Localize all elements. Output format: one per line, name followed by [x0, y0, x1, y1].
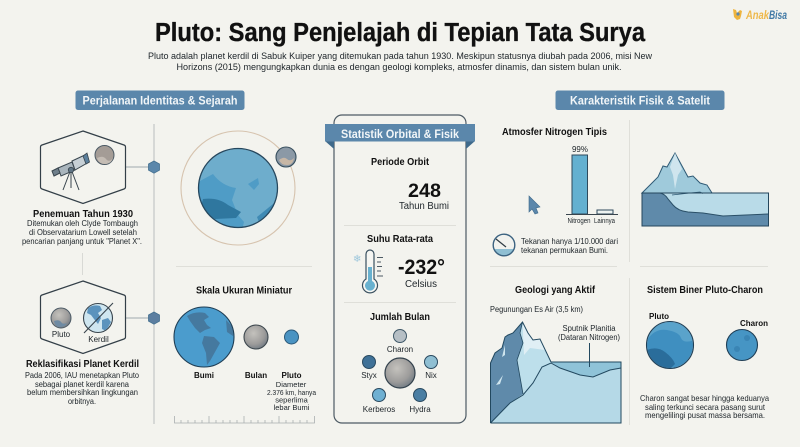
- text: reklasifikasi: [25, 358, 140, 406]
- icon: Pluto: Pluto: [282, 371, 302, 380]
- label: sputnik planitia: (Dataran Nitrogen): [558, 333, 620, 342]
- panel: geologi yang aktif: [490, 285, 621, 423]
- illustration: nitrogen glacier iceberg: [642, 153, 768, 226]
- moon: Kerberos: Kerberos: [363, 405, 395, 414]
- icon: Bumi: [174, 307, 234, 380]
- text: reklasifikasi: Reklasifikasi Planet Kerdil: [26, 358, 139, 370]
- panel: geologi yang aktif: Pegunungan Es Air (3,5 km): [490, 305, 583, 314]
- panel: atmosfer nitrogen tipis: Atmosfer Nitrogen Tipis: [502, 127, 607, 138]
- intro text: [148, 51, 652, 73]
- text: penemuan: Ditemukan oleh Clyde Tombaugh: [27, 219, 138, 228]
- heading: Karakteristik Fisik & Satelit: [556, 90, 724, 110]
- logo: AnakBisa: [733, 9, 787, 22]
- moon: Hydra: Hydra: [409, 405, 431, 414]
- text: charon note: mengelilingi pusat massa bersama.: [645, 410, 765, 420]
- stat: periode orbit: Tahun Bumi: [399, 201, 449, 212]
- intro text: Pluto adalah planet kerdil di Sabuk Kuiper yang ditemukan pada tahun 1930. Meskipun statusnya diubah pada 2006, misi New: [148, 51, 652, 62]
- banner: Statistik Orbital & Fisik: [341, 129, 460, 141]
- heading: Karakteristik Fisik & Satelit: Karakteristik Fisik & Satelit: [570, 96, 710, 108]
- banner: [325, 124, 475, 149]
- intro text: Horizons (2015) mengungkapkan dunia es dengan geologi kompleks, atmosfer dinamis, dan sistem bulan unik.: [176, 62, 622, 73]
- text: charon note: saling terkunci secara pasang surut: [645, 402, 766, 412]
- moon: Charon: Charon: [387, 345, 413, 354]
- logo: AnakBisa: Anak: [745, 10, 769, 22]
- stat: jumlah bulan: [361, 312, 438, 414]
- icon: pressure gauge: [492, 234, 516, 257]
- text: tekanan: [521, 236, 618, 255]
- stat: periode orbit: [371, 157, 449, 212]
- logo: AnakBisa: Bisa: [769, 10, 787, 22]
- text: tekanan: Tekanan hanya 1/10.000 dari: [521, 236, 618, 246]
- illustration: mountain and plain: [490, 322, 621, 423]
- timeline axis: [153, 124, 155, 424]
- heading: Perjalanan Identitas & Sejarah: Perjalanan Identitas & Sejarah: [82, 96, 238, 108]
- moon: Styx: Styx: [361, 371, 377, 380]
- illustration: Pluto orbit: [181, 131, 296, 245]
- bar chart: [566, 145, 618, 225]
- text: penemuan: [22, 209, 142, 246]
- timeline node: reklasifikasi: [125, 312, 160, 324]
- icon: Bumi: Bumi: [194, 371, 214, 380]
- panel: skala ukuran miniatur: Skala Ukuran Miniatur: [196, 286, 292, 296]
- text: penemuan: Penemuan Tahun 1930: [33, 209, 133, 220]
- icon: Pluto: [282, 330, 302, 380]
- icon: Bulan: [244, 325, 268, 380]
- icon: Charon: Charon: [740, 319, 768, 328]
- icon: pluto vs kerdil in hexagon: Pluto: [52, 330, 71, 339]
- icon: thermometer: ❄: [353, 254, 361, 265]
- text: penemuan: di Observatarium Lowell setelah: [29, 228, 137, 237]
- heading: Perjalanan Identitas & Sejarah: [76, 90, 244, 110]
- text: reklasifikasi: Pada 2006, IAU menetapkan Pluto: [25, 371, 140, 380]
- text: reklasifikasi: orbitnya.: [68, 397, 96, 406]
- timeline node: penemuan: [125, 161, 160, 173]
- icon: telescope in hexagon: [40, 131, 126, 204]
- label: sputnik planitia: [558, 324, 620, 342]
- panel: sistem biner pluto-charon: [640, 285, 769, 420]
- panel: statistik orbital & fisik: [325, 115, 475, 423]
- stat: suhu rata-rata: Celsius: [405, 279, 437, 290]
- stat: suhu rata-rata: Suhu Rata-rata: [367, 234, 433, 245]
- text: diameter: Diameter: [276, 380, 307, 389]
- stat: suhu rata-rata: [353, 234, 445, 293]
- text: diameter: seperlima: [275, 396, 309, 404]
- text: tekanan: tekanan permukaan Bumi.: [521, 245, 608, 255]
- panel: skala ukuran miniatur: [174, 286, 317, 423]
- text: reklasifikasi: sebagai planet kerdil karena: [35, 380, 130, 389]
- icon: Pluto: Pluto: [649, 312, 669, 321]
- label: sputnik planitia: Sputnik Planitia: [562, 324, 616, 333]
- text: charon note: Charon sangat besar hingga keduanya: [640, 393, 769, 403]
- text: diameter: [267, 380, 317, 412]
- bar chart: 99%: [572, 145, 588, 154]
- icon: Bulan: Bulan: [245, 371, 267, 380]
- text: charon note: [640, 393, 769, 420]
- icon: Pluto center: [385, 358, 415, 388]
- moon: Nix: Nix: [425, 371, 437, 380]
- stat: periode orbit: Periode Orbit: [371, 157, 430, 168]
- text: diameter: 2.376 km, hanya: [267, 388, 317, 397]
- icon: pluto vs kerdil in hexagon: Kerdil: [88, 335, 109, 344]
- scale ruler: [174, 416, 314, 423]
- bar chart: Lainnya: [594, 218, 615, 225]
- bar chart: Nitrogen: [568, 218, 591, 225]
- panel: atmosfer nitrogen tipis: [492, 127, 618, 257]
- title: Pluto: Sang Penjelajah di Tepian Tata Surya: [155, 19, 646, 47]
- stat: jumlah bulan: Jumlah Bulan: [370, 312, 430, 323]
- panel: reklasifikasi planet kerdil: [25, 281, 140, 406]
- panel: geologi yang aktif: Geologi yang Aktif: [515, 285, 596, 296]
- panel: sistem biner pluto-charon: Sistem Biner Pluto-Charon: [647, 285, 763, 296]
- stat: periode orbit: 248: [408, 180, 441, 202]
- text: diameter: lebar Bumi: [274, 403, 310, 412]
- panel: penemuan tahun 1930: [22, 131, 142, 246]
- text: reklasifikasi: belum membersihkan lingkungan: [27, 388, 138, 397]
- icon: pluto vs kerdil in hexagon: [40, 281, 126, 354]
- stat: suhu rata-rata: -232°: [398, 256, 445, 279]
- icon: cursor: [529, 196, 540, 214]
- text: penemuan: pencarian panjang untuk "Planet X".: [22, 237, 142, 246]
